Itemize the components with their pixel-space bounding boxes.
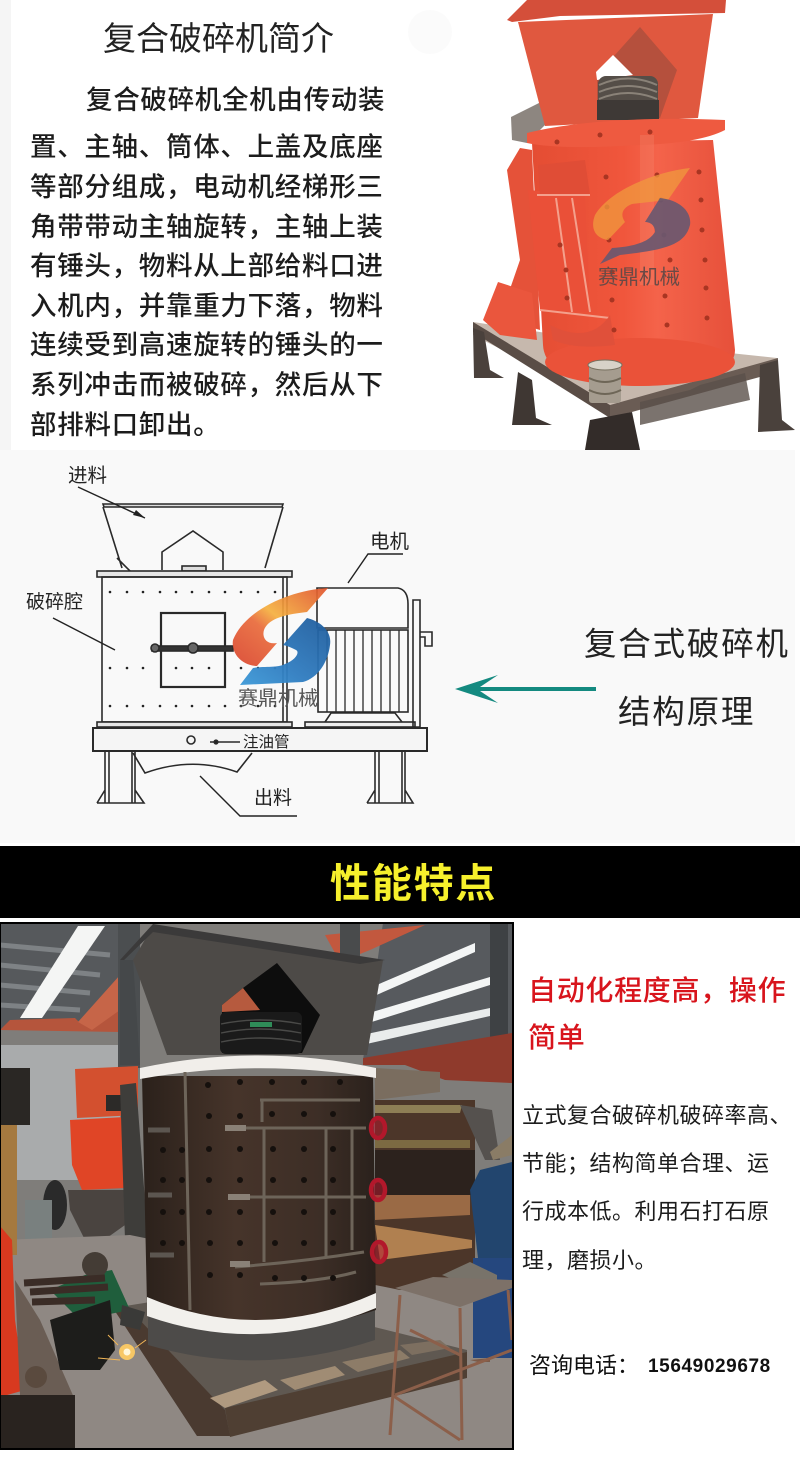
diagram section background <box>0 450 795 843</box>
ceiling right <box>325 923 513 1060</box>
text block: machine description: 连续受到高速旋转的锤头的一 <box>30 330 384 360</box>
label: crushing chamber: 破碎腔 <box>26 591 83 613</box>
illustration: red composite crusher <box>473 0 795 450</box>
floor <box>0 1235 513 1449</box>
ceiling left <box>0 923 140 1180</box>
heading: automation feature <box>528 975 786 1053</box>
small stacked ring parts <box>588 360 622 403</box>
body bolts <box>554 130 710 332</box>
text: phone contact <box>529 1353 771 1378</box>
label: discharge <box>200 776 297 816</box>
machine base platform <box>473 322 795 450</box>
lower gray cylinder <box>148 1310 375 1360</box>
heading: automation feature: 简单 <box>528 1022 585 1053</box>
left margin strip <box>0 0 11 450</box>
welding sparks <box>98 1335 146 1360</box>
logo watermark: diagram: 赛鼎机械 <box>238 687 318 710</box>
label: crushing chamber <box>26 591 115 650</box>
oil pipe marker <box>187 736 240 744</box>
gloves on table <box>442 1262 497 1280</box>
diagram: crusher structure principle <box>93 504 432 803</box>
text: phone contact: 咨询电话： <box>529 1353 639 1378</box>
base frame <box>113 1290 467 1437</box>
label: feed inlet: 进料 <box>68 465 107 487</box>
label: motor <box>348 531 410 583</box>
crusher body <box>527 119 735 386</box>
decorative white circle glare <box>408 10 452 54</box>
text block: machine description: 部排料口卸出。 <box>30 410 220 440</box>
red beam right <box>363 1033 512 1083</box>
crushing chamber <box>97 571 292 727</box>
photo black frame <box>0 923 513 1449</box>
support gusset <box>483 100 545 340</box>
logo watermark: red machine <box>593 168 690 289</box>
photo: rusted crusher in workshop <box>0 923 513 1449</box>
heading: structure principle <box>584 626 790 730</box>
pulley dark <box>220 1012 302 1054</box>
base beam <box>93 728 427 751</box>
metal table <box>390 1277 512 1440</box>
left leg <box>97 751 144 803</box>
body rivets <box>160 1079 343 1281</box>
hopper <box>507 0 726 126</box>
text block: feature description: 行成本低。利用石打石原 <box>522 1199 770 1224</box>
logo watermark: red machine: 赛鼎机械 <box>598 266 680 289</box>
text block: feature description: 立式复合破碎机破碎率高、 <box>522 1103 792 1128</box>
text block: machine description: 系列冲击而被破碎，然后从下 <box>30 370 384 400</box>
workshop background <box>1 924 512 1258</box>
right worker <box>470 1135 512 1362</box>
banner: performance features <box>0 846 800 918</box>
background red machine <box>43 1066 146 1238</box>
arrow: pointing to diagram <box>455 675 596 703</box>
upper white ring <box>140 1056 376 1079</box>
text block: machine description: 入机内，并靠重力下落，物料 <box>30 291 384 321</box>
pulley <box>597 76 659 120</box>
text block: feature description <box>522 1103 792 1273</box>
text block: machine description: 角带带动主轴旋转，主轴上装 <box>30 212 384 242</box>
label: discharge: 出料 <box>254 787 292 809</box>
chamber rivets <box>109 591 276 707</box>
heading: structure principle: 结构原理 <box>618 694 755 730</box>
text block: feature description: 节能；结构简单合理、运 <box>522 1151 770 1176</box>
heading: intro title: 复合破碎机简介 <box>103 20 334 57</box>
logo watermark: diagram <box>233 588 330 710</box>
text block: machine description <box>30 85 385 440</box>
heading: automation feature: 自动化程度高，操作 <box>528 975 786 1006</box>
red handwheels <box>371 1118 386 1262</box>
text block: machine description: 复合破碎机全机由传动装 <box>86 85 385 115</box>
lower white ring <box>147 1293 376 1334</box>
right leg <box>367 751 413 803</box>
hopper dark <box>120 924 385 1065</box>
top section background <box>0 0 800 450</box>
text block: feature description: 理，磨损小。 <box>522 1248 657 1273</box>
vibrating screen <box>375 1068 500 1290</box>
left foreground machine <box>0 1125 75 1449</box>
feed hopper <box>103 504 283 572</box>
rusted body <box>142 1076 376 1329</box>
label: motor: 电机 <box>370 531 410 553</box>
label: feed inlet <box>68 465 145 518</box>
text block: machine description: 等部分组成，电动机经梯形三 <box>30 172 384 202</box>
banner: performance features: 性能特点 <box>330 862 497 906</box>
body frame bars <box>148 1072 366 1310</box>
text block: machine description: 有锤头，物料从上部给料口进 <box>30 251 384 281</box>
text block: machine description: 置、主轴、筒体、上盖及底座 <box>30 132 384 162</box>
heading: structure principle: 复合式破碎机 <box>584 626 790 662</box>
label: oil pipe: 注油管 <box>243 733 290 751</box>
motor <box>305 588 432 727</box>
discharge chute <box>133 753 252 773</box>
text: phone contact: 15649029678 <box>648 1356 771 1377</box>
welding worker <box>24 1252 145 1370</box>
